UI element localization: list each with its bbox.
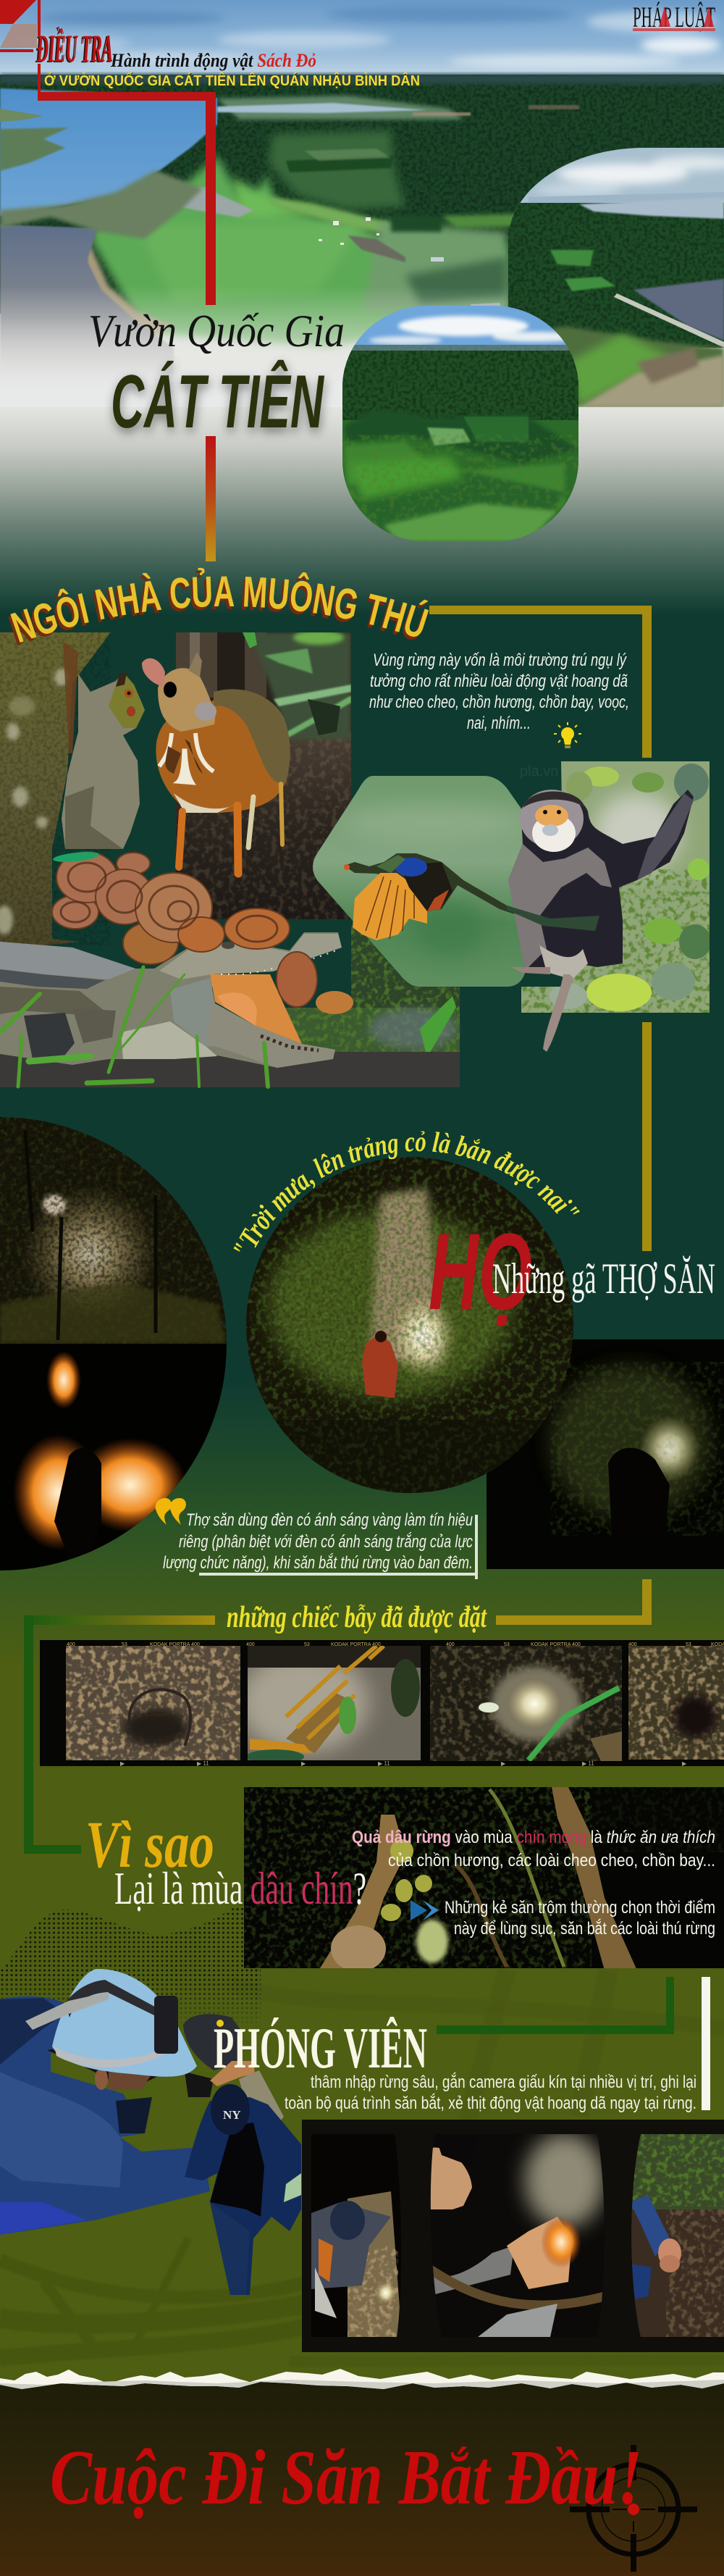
quote text: riêng (phân biệt với đèn có ánh sáng trắng của lực bbox=[179, 1532, 473, 1552]
film strip: traps: 400 bbox=[246, 1642, 255, 1647]
intro paragraph: như cheo cheo, chồn hương, chồn bay, voọc, bbox=[369, 693, 629, 712]
photo: leaves behind douc langur bbox=[518, 761, 713, 1013]
photo: right hunter silhouette bbox=[487, 1339, 724, 1569]
photo: mouse deer bbox=[142, 630, 351, 919]
title: CÁT TIÊN: CÁT TIÊN bbox=[111, 360, 324, 444]
photo: center circle hunter with tree bbox=[246, 1157, 573, 1496]
berry text bbox=[352, 1828, 715, 1939]
film strip: traps: ▶ 11 bbox=[378, 1760, 390, 1767]
frame 3 bbox=[628, 2134, 724, 2338]
lower frame bbox=[24, 1579, 652, 1854]
berry text: Quả dâu rừng vào mùa chín mọng là thức ăn ưa thích bbox=[352, 1828, 715, 1847]
icon: light bulb bbox=[554, 722, 581, 748]
halftone dot wave bbox=[0, 1902, 261, 2028]
intro paragraph bbox=[369, 651, 629, 733]
gold frame bbox=[429, 606, 652, 1251]
quote text: lượng chức năng), khi săn bắt thú rừng vào ban đêm. bbox=[163, 1553, 473, 1573]
photo: left circle lamp-lit forest and fire bbox=[0, 1116, 232, 1576]
heading: Những chiếc bẫy đã được đặt: những chiếc bẫy đã được đặt bbox=[227, 1601, 487, 1634]
film strip: traps: ▶ bbox=[120, 1760, 125, 1767]
torn paper edge bbox=[0, 2369, 724, 2389]
kicker line: Hành trình động vật Sách Đỏ bbox=[110, 50, 316, 71]
quote text: Thợ săn dùng đèn có ánh sáng vàng làm tín hiệu bbox=[186, 1510, 473, 1530]
crocodile bbox=[0, 932, 460, 1087]
grass over crocodile bbox=[0, 967, 268, 1087]
quote text bbox=[163, 1510, 473, 1573]
intro paragraph: nai, nhím... bbox=[467, 714, 531, 733]
bracket: green bbox=[437, 1977, 674, 2034]
hero aerial photo bbox=[0, 0, 724, 407]
text: ĐIỀU TRA bbox=[37, 26, 113, 70]
film strip: traps: 53 bbox=[504, 1642, 510, 1647]
section heading arc: Ngôi nhà của muông thú: NGÔI NHÀ CỦA MUÔNG THÚ bbox=[8, 568, 429, 645]
mushroom behind jaw bbox=[277, 952, 317, 1007]
film strip: traps: 400 bbox=[446, 1642, 455, 1647]
bottom band bbox=[0, 2381, 724, 2576]
peacock bbox=[344, 853, 599, 940]
corner tab: red triangle and brown block bbox=[0, 0, 37, 52]
film strip: traps: 53 bbox=[122, 1642, 127, 1647]
icon: double blue arrow bbox=[411, 1900, 439, 1920]
heading: HỌ: HỌ bbox=[429, 1210, 532, 1332]
film strip: traps: ▶ bbox=[501, 1760, 506, 1767]
bamboo texture bbox=[0, 1970, 724, 2362]
film strip: traps: 400 bbox=[67, 1642, 75, 1647]
film strip: traps: 53 bbox=[304, 1642, 310, 1647]
red line segment below title bbox=[206, 436, 216, 561]
icon: crosshair bbox=[570, 2445, 697, 2572]
photo: grass and water behind crocodile bbox=[286, 926, 460, 1087]
photo: tree trunk with flying lemur bbox=[0, 632, 145, 945]
douc langur bbox=[507, 790, 694, 1052]
trap photo 2 bbox=[239, 1646, 421, 1764]
film strip: traps: KODAK PORTRA 400 bbox=[331, 1642, 381, 1647]
intro paragraph: tưởng cho rất nhiều loài động vật hoang dã bbox=[370, 672, 628, 691]
small mushroom right bbox=[316, 991, 353, 1014]
reporter with headlamp bbox=[0, 1969, 284, 2235]
trap photo 4 bbox=[628, 1646, 724, 1760]
photo: lingzhi mushrooms bbox=[52, 850, 353, 1014]
quote marks bbox=[156, 1498, 186, 1525]
film strip: traps: ▶ 11 bbox=[197, 1760, 209, 1767]
red frame line top bbox=[38, 0, 216, 305]
heading: Lại là mùa dâu chín?: Lại là mùa dâu chín? bbox=[114, 1862, 366, 1914]
photo: right pill lake view bbox=[507, 148, 724, 407]
quote bracket bbox=[199, 1515, 476, 1579]
photo: peacock hexagon bbox=[313, 776, 525, 987]
film strip: traps: KODAK PORTRA 400 bbox=[531, 1642, 581, 1647]
trap photo 3 bbox=[430, 1646, 622, 1761]
frame 1 bbox=[311, 2134, 405, 2338]
quote arc: Trời mưa, lên trảng cỏ là bắn được nai: "Trời mưa, lên trảng cỏ là bắn được nai" bbox=[233, 1132, 580, 1252]
intro paragraph: Vùng rừng này vốn là môi trường trú ngụ lý bbox=[373, 651, 628, 670]
film strip: camera placement bbox=[302, 2120, 724, 2352]
film strip: traps: ▶ bbox=[682, 1760, 687, 1767]
second reporter bbox=[185, 2084, 301, 2295]
second reporter: NY bbox=[223, 2108, 241, 2122]
heading: Phóng viên: PHÓNG VIÊN bbox=[214, 2017, 427, 2081]
headline line: Ở VƯỜN QUỐC GIA CÁT TIÊN LÊN QUÁN NHẬU BÌNH DÂN bbox=[44, 72, 420, 89]
film strip: traps bbox=[40, 1640, 724, 1767]
trap photo 1 bbox=[66, 1646, 240, 1760]
film strip: traps: 400 bbox=[628, 1642, 637, 1647]
photo: mulberry trees at night bbox=[244, 1787, 724, 1972]
watermark: pla.vn bbox=[520, 764, 558, 779]
film strip: traps: 53 bbox=[686, 1642, 691, 1647]
heading: Vì sao: Vì sao bbox=[85, 1807, 214, 1881]
film strip: traps: ▶ 11 bbox=[582, 1760, 594, 1767]
frame 2 bbox=[427, 2133, 608, 2338]
white side bar bbox=[702, 1977, 710, 2110]
reporter text bbox=[285, 2073, 696, 2113]
title script: Vườn Quốc Gia: Vườn Quốc Gia bbox=[88, 305, 345, 356]
film strip: traps: ▶ bbox=[301, 1760, 306, 1767]
film strip: traps: KODAK PORTRA 400 bbox=[150, 1642, 200, 1647]
photo: center pill forest fields bbox=[340, 304, 581, 543]
